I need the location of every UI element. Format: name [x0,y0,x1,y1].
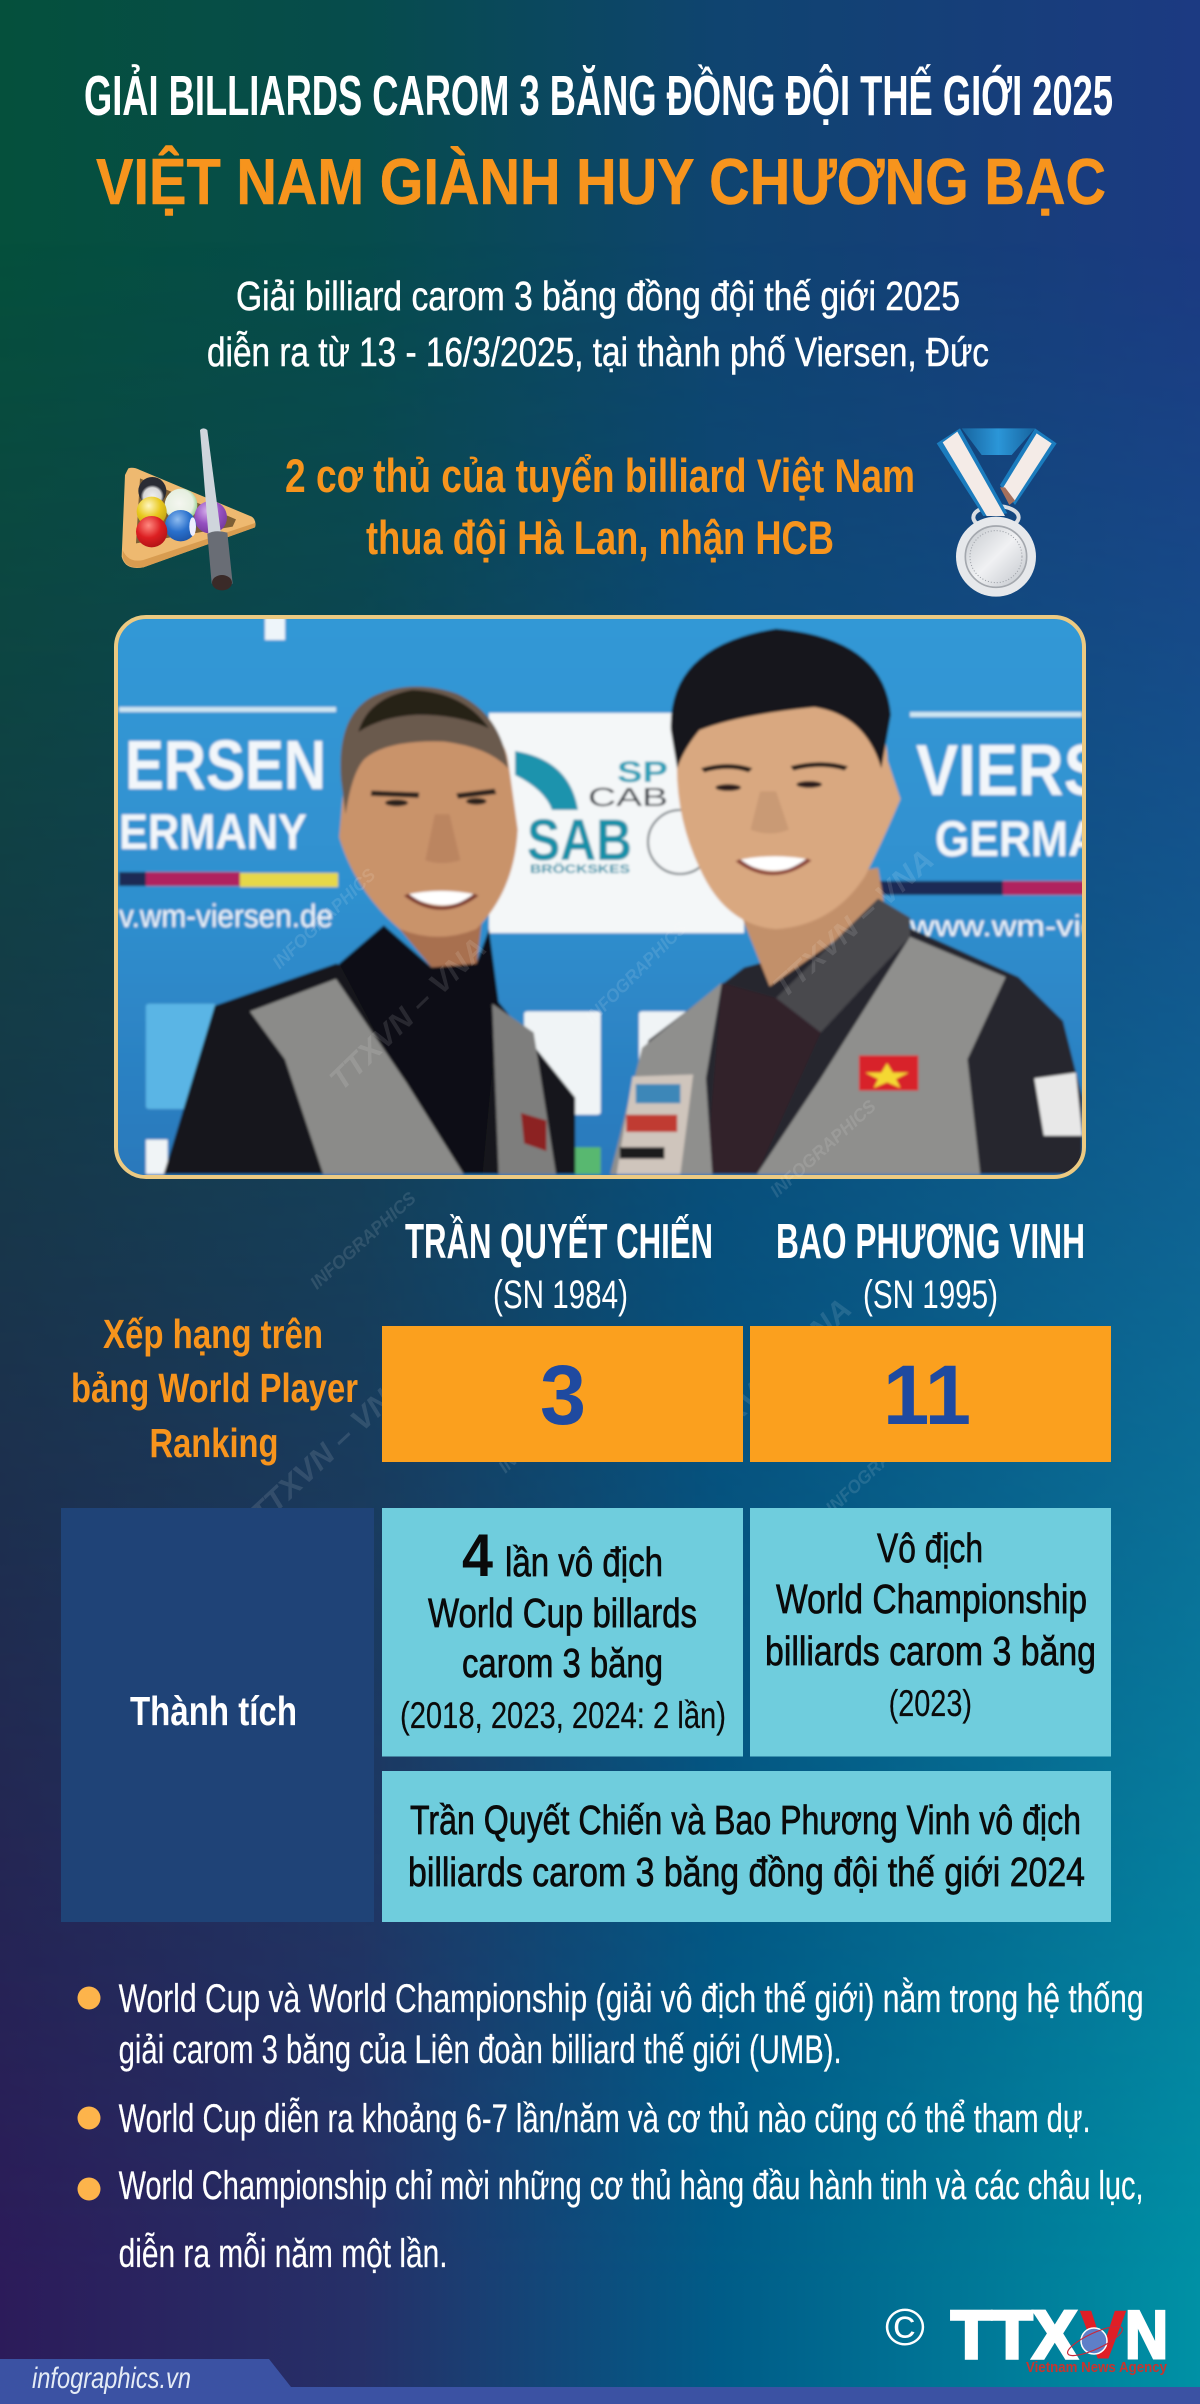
watermarks: INFOGRAPHICS [822,1411,934,1518]
player names: (SN 1984) [493,1273,628,1317]
backdrop text and panels: CAB [588,782,668,812]
achievements cell: player 2: Vô địch [877,1525,983,1571]
note 1 [78,1976,1144,2072]
logo: TTXVN agency: Vietnam News Agency [1026,2359,1168,2376]
notes list [78,1976,1144,2276]
achievements cell: player 1: lần vô địch [505,1539,663,1585]
intro text: diễn ra từ 13 - 16/3/2025, tại thành phố Viersen, Đức [207,329,989,375]
icon: silver medal [937,428,1057,597]
logo: TTXVN agency [885,2297,1168,2376]
watermarks: TTXVN – VNA [767,843,940,1004]
watermarks: INFOGRAPHICS [766,1096,880,1201]
achievements cell: player 1: 4 [462,1522,494,1589]
achievements cell: player 2: billiards carom 3 băng [765,1628,1096,1674]
achievements cell: player 1 [382,1508,743,1756]
logo: TTXVN agency: N [1125,2297,1168,2373]
backdrop text and panels: VIERS [916,731,1106,811]
intro text: Giải billiard carom 3 băng đồng đội thế giới 2025 [236,273,960,319]
backdrop text and panels: ERMANY [119,804,307,860]
ranking cell: player 2: 11 [883,1348,971,1442]
achievements label panel: Thành tích [130,1688,297,1734]
achievements cell: player 2: World Championship [776,1576,1087,1622]
ranking label: Xếp hạng trên [103,1311,323,1357]
player names: (SN 1995) [863,1273,998,1317]
player names [405,1215,1085,1317]
logo: TTXVN agency: V [1080,2297,1126,2373]
achievements cell: player 2 [750,1508,1111,1756]
callout: silver medal result: thua đội Hà Lan, nhận HCB [366,511,834,564]
ranking label: bảng World Player [71,1365,358,1411]
achievements cell: player 2: (2023) [889,1683,972,1724]
achievements cell: player 1: carom 3 băng [462,1640,663,1686]
watermarks: TTXVN – VNA [324,931,493,1097]
watermarks: INFOGRAPHICS [581,918,691,1028]
achievements cell: player 1: World Cup billards [428,1590,697,1636]
left player [164,687,575,1174]
note 3 [78,2164,1144,2276]
ranking cell: player 2 [750,1326,1111,1462]
backdrop text and panels: v.wm-viersen.de [119,898,333,934]
watermarks: TTXVN – VNA [244,1368,415,1532]
icon: billiard rack and cue [122,428,256,590]
right player [610,629,1082,1174]
backdrop text and panels: GERMA [935,811,1100,867]
backdrop text and panels: SAB [527,808,632,873]
ranking label: Ranking [150,1420,278,1466]
footer bar: infographics.vn [32,2362,191,2395]
footer bar [0,2359,1200,2404]
backdrop text and panels: BRÖCKSKES [530,861,630,876]
watermarks: INFOGRAPHICS [268,865,379,973]
title block [84,63,1113,218]
watermarks: INFOGRAPHICS [306,1188,420,1293]
achievements cell: team [382,1771,1111,1922]
ranking cell: player 1: 3 [540,1348,586,1442]
callout: silver medal result [285,449,915,564]
player names: TRẦN QUYẾT CHIẾN [405,1215,713,1269]
ranking label [71,1311,358,1466]
intro text [207,273,989,375]
note 3: diễn ra mỗi năm một lần. [119,2231,448,2276]
backdrop text and panels: ERSEN [125,726,326,804]
backdrop text and panels: SP [617,756,668,789]
watermarks: TTXVN – VNA [689,1292,858,1458]
backdrop text and panels [119,617,1106,943]
player photo [116,617,1106,1177]
logo: TTXVN agency: TTX [951,2297,1077,2373]
watermarks: INFOGRAPHICS [494,1369,605,1477]
note 1: giải carom 3 băng của Liên đoàn billiard thế giới (UMB). [119,2028,842,2072]
watermarks [244,843,940,1532]
achievements cell: player 1: (2018, 2023, 2024: 2 lần) [400,1695,726,1736]
achievements label panel [61,1508,374,1922]
logo: TTXVN agency: © [885,2299,925,2357]
backdrop text and panels: www.wm-vie [909,910,1100,943]
backdrop tiles [146,1004,715,1174]
ranking cell: player 1 [382,1326,743,1462]
callout: silver medal result: 2 cơ thủ của tuyển billiard Việt Nam [285,449,915,502]
